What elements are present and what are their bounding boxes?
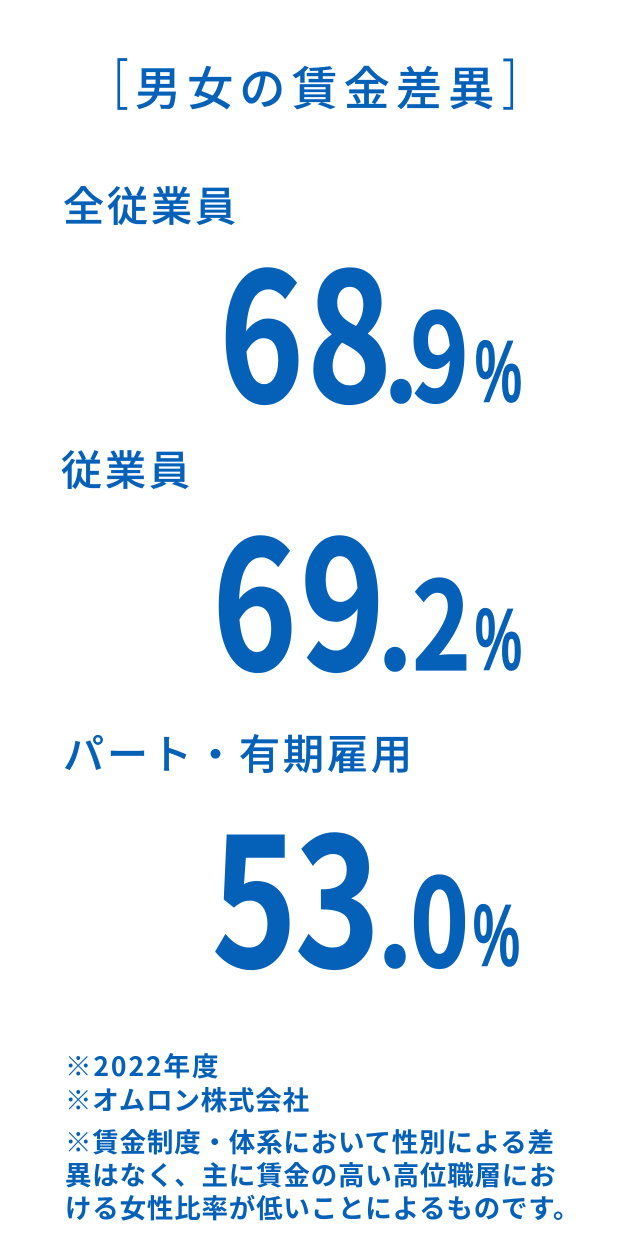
figure: 68.9%: 6 bbox=[219, 195, 304, 454]
figure: 68.9%: 8 bbox=[307, 195, 392, 454]
figure: 69.2%: 9 bbox=[300, 463, 385, 722]
figure: 69.2%: 6 bbox=[212, 463, 297, 722]
figure: 53.0%: 5 bbox=[212, 760, 297, 1019]
title: text: 男女の賃金差異 bbox=[135, 53, 500, 119]
figure: 68.9%: 9 bbox=[410, 262, 469, 438]
note: fiscal year: ※2022年度 bbox=[65, 1045, 220, 1084]
label: all employees: 全従業員 bbox=[63, 173, 239, 233]
figure: 53.0%: 0 bbox=[410, 827, 469, 1003]
label: employees: 従業員 bbox=[61, 437, 193, 497]
figure: 69.2% bbox=[212, 463, 522, 722]
figure: 68.9%: . bbox=[382, 252, 420, 440]
note: explanation bbox=[65, 1121, 580, 1226]
note: explanation: ける女性比率が低いことによるものです。 bbox=[65, 1187, 580, 1226]
figure: 53.0%: . bbox=[376, 817, 414, 1005]
title: left bracket: ［ bbox=[90, 41, 129, 121]
figure: 68.9% bbox=[219, 195, 522, 454]
title bbox=[90, 41, 541, 121]
figure: 53.0%: 3 bbox=[295, 760, 380, 1019]
figure: 68.9%: % bbox=[475, 323, 522, 421]
figure: 53.0%: % bbox=[473, 887, 520, 985]
note: company: ※オムロン株式会社 bbox=[65, 1079, 310, 1118]
figure: 69.2%: % bbox=[475, 591, 522, 689]
figure: 53.0% bbox=[212, 760, 520, 1019]
figure: 69.2%: 2 bbox=[412, 530, 471, 706]
label: part-time and fixed-term: パート・有期雇用 bbox=[63, 721, 415, 781]
note: explanation: ※賃金制度・体系において性別による差 bbox=[65, 1121, 555, 1160]
figure: 69.2%: . bbox=[376, 520, 414, 708]
title: right bracket: ］ bbox=[502, 41, 541, 121]
note: explanation: 異はなく、主に賃金の高い高位職層にお bbox=[65, 1154, 556, 1193]
